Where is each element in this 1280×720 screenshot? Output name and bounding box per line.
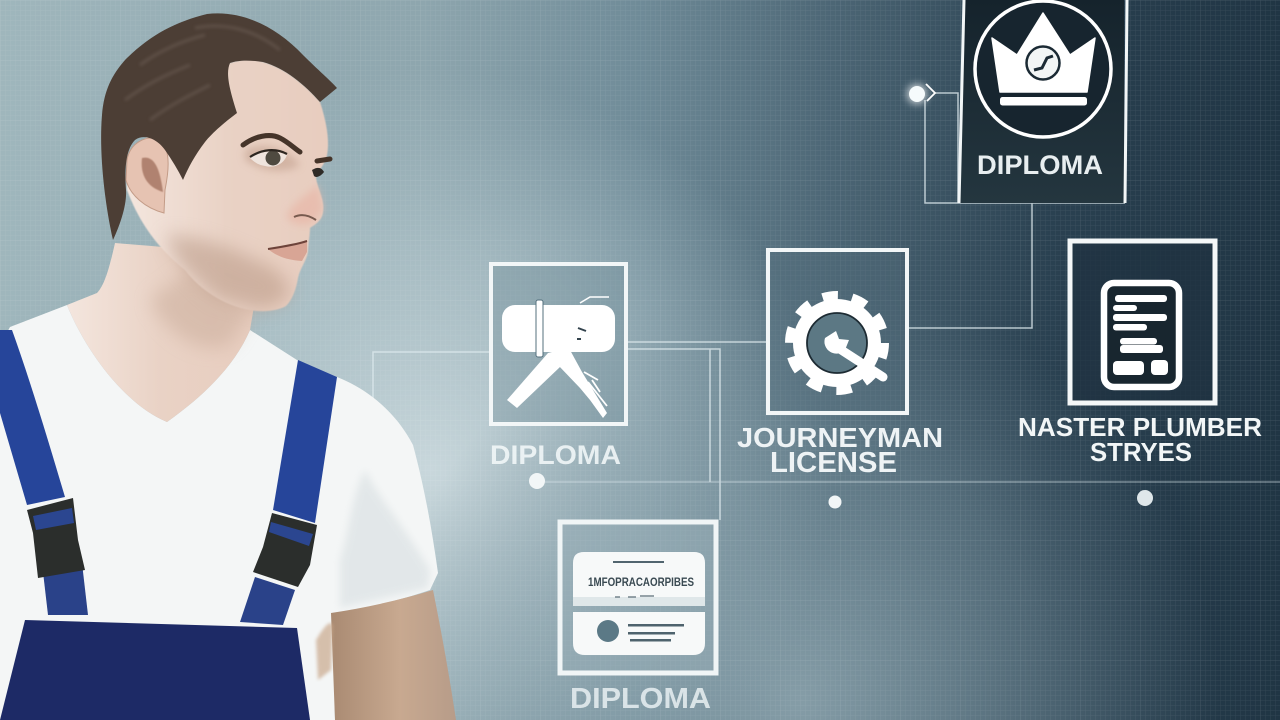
figure: plumber: [0, 13, 456, 720]
hair: [101, 13, 337, 240]
arm: [331, 590, 456, 720]
label: master plumber: [1018, 412, 1262, 467]
right buckle: [253, 513, 317, 587]
eye socket shadow: [245, 146, 300, 171]
label: master plumber: NASTER PLUMBER: [1018, 412, 1262, 442]
ear: [126, 138, 168, 213]
label: journeyman license: LICENSE: [770, 447, 897, 479]
label: master plumber: STRYES: [1090, 437, 1192, 467]
left buckle: [27, 498, 85, 578]
panel: diploma pipe card: [490, 264, 626, 470]
label: journeyman license: JOURNEYMAN: [737, 422, 943, 453]
white t-shirt: [0, 305, 438, 720]
underarm shadow: [316, 623, 333, 680]
nose: [287, 185, 323, 225]
label: top diploma: DIPLOMA: [977, 150, 1103, 180]
icon: certificate: 1MFOPRACAORPIBES: [588, 577, 694, 589]
panel: top diploma card with crown: [958, 0, 1127, 203]
mouth: [268, 240, 307, 261]
sleeve shading: [340, 470, 430, 608]
panel: journeyman license card: [737, 250, 943, 479]
label: journeyman license: [737, 422, 943, 479]
node: top glowing connector: [907, 84, 935, 104]
neck shadow: [150, 270, 252, 348]
hair texture: [125, 26, 280, 120]
panel: master plumber card: [1018, 241, 1262, 467]
icon: document: [1104, 283, 1179, 387]
neck: [67, 243, 255, 422]
panel: bottom diploma card: [560, 522, 716, 715]
icon: crown in circle: [975, 1, 1111, 137]
face: [127, 60, 328, 311]
stubble: [165, 235, 289, 310]
icon: cracked pipe and hammer: [502, 297, 615, 418]
connector lines: [373, 93, 1280, 520]
icon: gear with wrench: [791, 297, 883, 389]
right strap: [273, 360, 337, 523]
label: diploma: DIPLOMA: [490, 440, 621, 470]
left strap: [0, 330, 65, 505]
overalls bib: [0, 620, 310, 720]
label: bottom diploma: DIPLOMA: [570, 683, 711, 715]
timeline nodes: [529, 473, 1153, 508]
icon: certificate: [573, 552, 705, 655]
brows and eyes: [243, 136, 330, 161]
